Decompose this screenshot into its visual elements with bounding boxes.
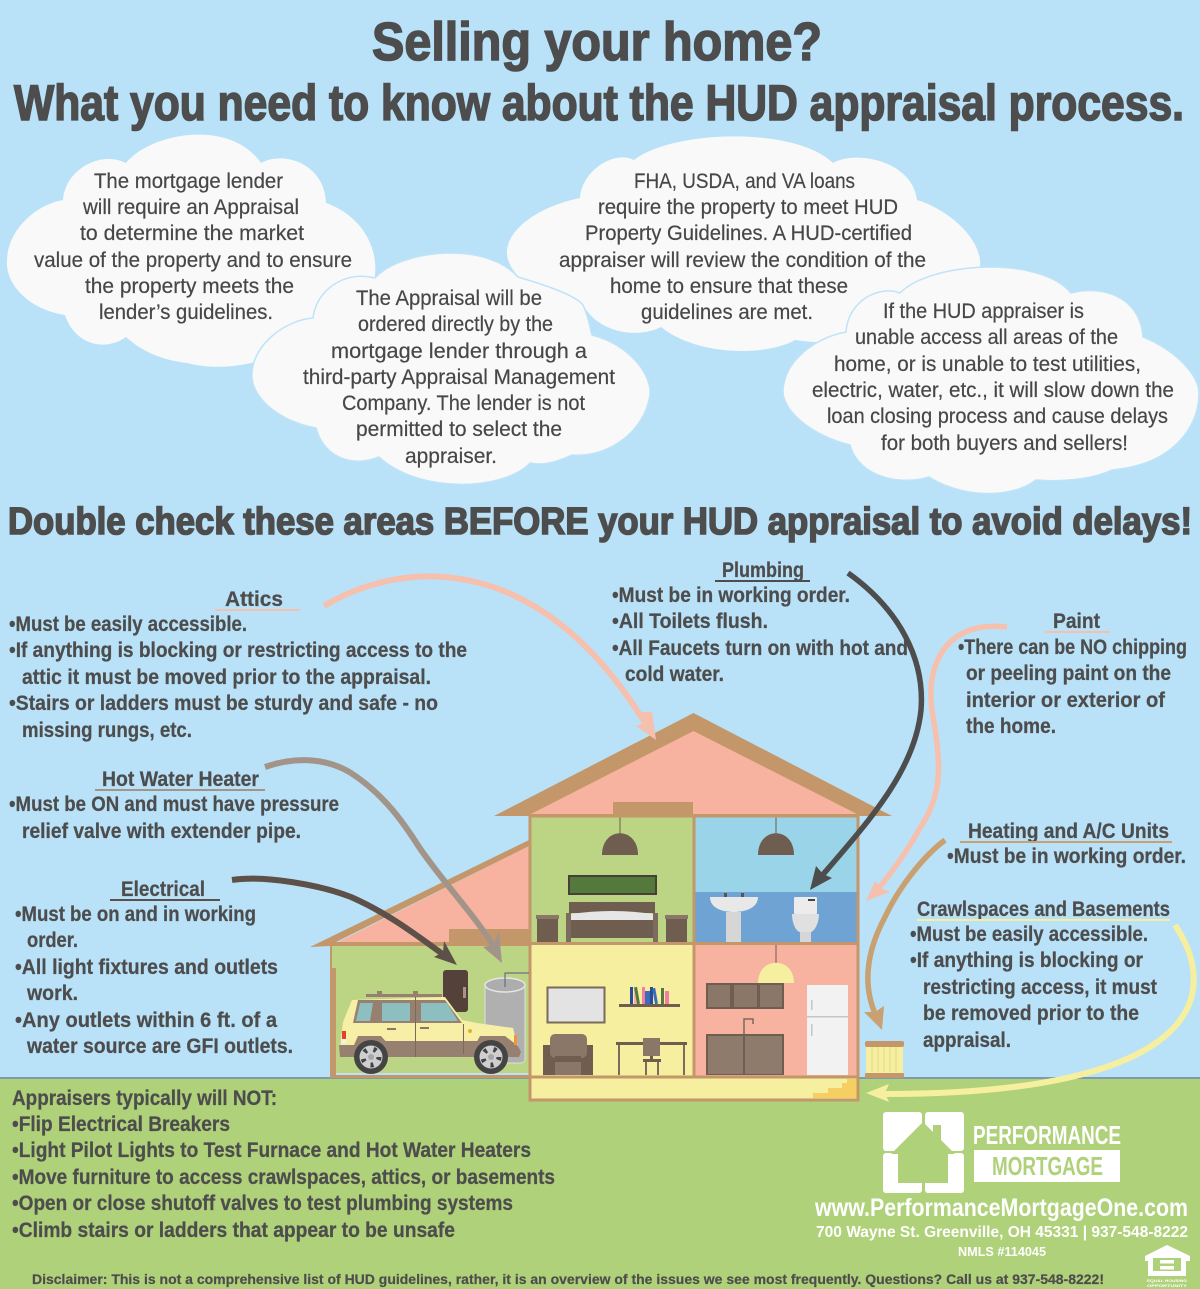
car: [339, 991, 521, 1074]
icon: equal housing opportunity: EQUAL HOUSING: [1147, 1278, 1187, 1283]
text block: crawlspaces: restricting access, it must: [923, 976, 1157, 999]
panel: cloud mortgage lender: value of the property and to ensure: [34, 249, 352, 272]
arrow: attics: [324, 576, 656, 740]
panel: cloud access delays: [783, 267, 1199, 494]
text block: crawlspaces: •If anything is blocking or: [910, 949, 1143, 972]
panel: cloud appraisal ordered: The Appraisal will be: [356, 287, 542, 310]
text block: plumbing: [612, 559, 908, 686]
panel: cloud mortgage lender: will require an Appraisal: [82, 196, 299, 219]
logo: performance mortgage: MORTGAGE: [992, 1151, 1103, 1181]
text block: appraisers will not: •Light Pilot Lights to Test Furnace and Hot Water Heaters: [12, 1139, 531, 1162]
icon: house logo: [883, 1112, 964, 1193]
panel: cloud mortgage lender: The mortgage lender: [94, 170, 283, 193]
text block: paint: or peeling paint on the: [966, 662, 1171, 685]
icon: equal housing opportunity: OPPORTUNITY: [1147, 1283, 1187, 1288]
panel: cloud appraisal ordered: [252, 253, 650, 484]
arrow: electrical: [232, 879, 457, 965]
text block: appraisers will not: •Move furniture to access crawlspaces, attics, or basements: [12, 1166, 555, 1189]
nmls number: NMLS #114045: [958, 1244, 1046, 1259]
electrical panel: [443, 970, 468, 1012]
text block: hot water heater: •Must be ON and must have pressure: [9, 793, 339, 816]
text block: plumbing: •All Faucets turn on with hot and: [612, 637, 908, 660]
arrow: hot water heater: [265, 760, 502, 963]
ground: [0, 1077, 1200, 1289]
text block: electrical: [15, 878, 293, 1058]
panel: cloud FHA USDA VA: FHA, USDA, and VA loans: [634, 170, 855, 193]
text block: heating and A/C: [947, 820, 1186, 868]
panel: cloud mortgage lender: lender’s guidelines.: [99, 301, 273, 324]
text block: plumbing: cold water.: [625, 663, 724, 686]
text block: electrical: •Any outlets within 6 ft. of a: [15, 1009, 277, 1032]
panel: cloud mortgage lender: to determine the market: [80, 222, 304, 245]
water heater: [485, 973, 529, 1063]
panel: cloud FHA USDA VA: [507, 136, 980, 351]
arrow: crawlspaces: [866, 925, 1194, 1102]
arrow: paint: [866, 626, 1007, 901]
panel: cloud access delays: electric, water, etc., it will slow down the: [812, 379, 1174, 402]
text block: hot water heater: [9, 768, 339, 843]
illustration: house cutaway: [310, 713, 904, 1100]
text block: paint: interior or exterior of: [966, 689, 1166, 712]
text block: attics: missing rungs, etc.: [22, 719, 192, 742]
panel: cloud FHA USDA VA: appraiser will review the condition of the: [559, 249, 926, 272]
text block: appraisers will not: Appraisers typically will NOT:: [12, 1087, 277, 1110]
title: Selling your home?: [372, 12, 822, 72]
text block: electrical: work.: [26, 982, 78, 1005]
text block: electrical: order.: [27, 929, 78, 952]
text block: attics: Attics: [225, 588, 283, 611]
panel: cloud mortgage lender: the property meets the: [85, 275, 294, 298]
text block: attics: •Stairs or ladders must be sturdy and safe - no: [9, 692, 438, 715]
text block: heating and A/C: Heating and A/C Units: [968, 820, 1169, 843]
text block: electrical: •Must be on and in working: [15, 903, 256, 926]
text block: paint: Paint: [1053, 610, 1100, 633]
text block: crawlspaces: [910, 898, 1170, 1052]
house walls: [530, 816, 858, 1100]
panel: cloud access delays: for both buyers and sellers!: [881, 432, 1128, 455]
panel: cloud appraisal ordered: ordered directly by the: [358, 313, 553, 336]
panel: cloud access delays: loan closing process and cause delays: [827, 405, 1168, 428]
text block: paint: the home.: [966, 715, 1056, 738]
disclaimer: Disclaimer: This is not a comprehensive list of HUD guidelines, rather, it is an overview of the issues we see most frequently. Questions? Call us at 937-548-8222!: [32, 1271, 1104, 1287]
text block: attics: •Must be easily accessible.: [9, 613, 247, 636]
text block: crawlspaces: appraisal.: [923, 1029, 1011, 1052]
text block: electrical: •All light fixtures and outlets: [15, 956, 278, 979]
text block: attics: [9, 588, 467, 742]
panel: cloud appraisal ordered: appraiser.: [405, 445, 497, 468]
text block: plumbing: •Must be in working order.: [612, 584, 850, 607]
text block: hot water heater: Hot Water Heater: [102, 768, 259, 791]
address: 700 Wayne St. Greenville, OH 45331 | 937-548-8222: [816, 1224, 1188, 1241]
text block: appraisers will not: •Climb stairs or ladders that appear to be unsafe: [12, 1219, 455, 1242]
text block: appraisers will not: •Flip Electrical Breakers: [12, 1113, 230, 1136]
text block: crawlspaces: •Must be easily accessible.: [910, 923, 1148, 946]
text block: electrical: Electrical: [121, 878, 205, 901]
logo: performance mortgage: [883, 1112, 1121, 1193]
room: kitchen: [694, 943, 859, 1077]
title: [14, 12, 1184, 131]
text block: hot water heater: relief valve with extender pipe.: [22, 820, 301, 843]
panel: cloud FHA USDA VA: guidelines are met.: [641, 301, 813, 324]
panel: cloud appraisal ordered: mortgage lender through a: [331, 340, 587, 363]
panel: cloud appraisal ordered: Company. The lender is not: [342, 392, 585, 415]
text block: appraisers will not: [12, 1087, 555, 1242]
panel: cloud appraisal ordered: permitted to select the: [356, 418, 562, 441]
arrow: plumbing: [810, 573, 921, 890]
panel: cloud access delays: unable access all areas of the: [855, 326, 1118, 349]
panel: cloud FHA USDA VA: require the property to meet HUD: [598, 196, 898, 219]
text block: crawlspaces: Crawlspaces and Basements: [917, 898, 1170, 921]
outdoor heating unit: [865, 1041, 904, 1078]
logo: performance mortgage: PERFORMANCE: [973, 1120, 1121, 1150]
room: bedroom: [529, 816, 694, 943]
panel: cloud mortgage lender: [7, 135, 375, 367]
text block: plumbing: Plumbing: [722, 559, 804, 582]
text block: electrical: water source are GFI outlets.: [26, 1035, 293, 1058]
text block: paint: [958, 610, 1187, 738]
text block: attics: attic it must be moved prior to the appraisal.: [22, 666, 431, 689]
room: basement: [530, 1078, 858, 1100]
panel: cloud FHA USDA VA: home to ensure that these: [610, 275, 848, 298]
text block: appraisers will not: •Open or close shutoff valves to test plumbing systems: [12, 1192, 513, 1215]
text block: attics: •If anything is blocking or restricting access to the: [9, 639, 467, 662]
panel: cloud access delays: If the HUD appraiser is: [883, 300, 1084, 323]
panel: cloud FHA USDA VA: Property Guidelines. A HUD-certified: [585, 222, 912, 245]
arrow: heating: [864, 840, 945, 1030]
panel: cloud access delays: home, or is unable to test utilities,: [834, 353, 1141, 376]
icon: equal housing opportunity: [1145, 1245, 1190, 1288]
main roof: [494, 713, 892, 816]
room: living room: [529, 943, 694, 1077]
text block: crawlspaces: be removed prior to the: [923, 1002, 1139, 1025]
text block: plumbing: •All Toilets flush.: [612, 610, 768, 633]
room: bathroom: [694, 816, 859, 943]
garage: [310, 840, 529, 1078]
panel: cloud appraisal ordered: third-party Appraisal Management: [303, 366, 615, 389]
